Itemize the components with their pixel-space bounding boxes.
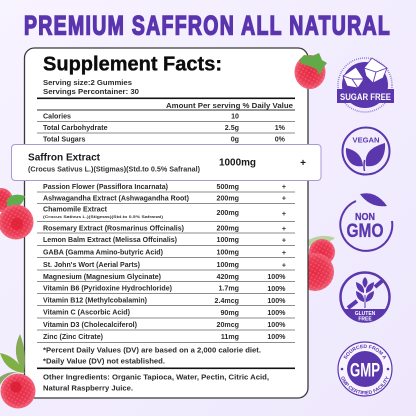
rows: herbal blend: + — [282, 210, 286, 218]
rows: herbal blend: Ashwagandha Extract (Ashwagandha Root) — [43, 194, 190, 202]
raspberry bottom left — [0, 334, 36, 408]
rows: general: 1% — [275, 124, 286, 132]
other ingredients: Other Ingredients: Organic Tapioca, Water, Pectin, Citric Acid, — [43, 372, 269, 382]
rows: herbal blend: 200mg — [217, 194, 239, 202]
rows: general: Total Carbohydrate — [43, 124, 108, 132]
other ingredients: Natural Raspberry Juice. — [43, 384, 133, 392]
rows: herbal blend: + — [282, 249, 286, 257]
callout: saffron extract: 1000mg — [219, 156, 256, 168]
rows: vitamins and minerals: Zinc (Zinc Citrate) — [43, 333, 104, 341]
title: PREMIUM SAFFRON ALL NATURAL — [24, 10, 390, 40]
rows: herbal blend: + — [282, 183, 286, 191]
rows: vitamins and minerals: 2.4mcg — [215, 297, 239, 305]
rows: herbal blend: 200mg — [217, 209, 239, 217]
rows: vitamins and minerals: 420mg — [217, 273, 239, 281]
icon: non gmo: NON — [355, 212, 375, 223]
rows: herbal blend: (Crocus Sativus L.)(Stigmas)(Std.to 0.5% Safranal) — [43, 214, 164, 219]
footnotes — [43, 346, 261, 366]
footnotes: *Daily Value (DV) not established. — [43, 356, 165, 366]
rows: general: 10 — [231, 112, 239, 120]
callout: saffron extract: (Crocus Sativus L.)(Stigmas)(Std.to 0.5% Safranal) — [28, 166, 200, 174]
rows: herbal blend: Passion Flower (Passiflora Incarnata) — [43, 183, 169, 191]
serving info: Serving size:2 Gummies — [43, 79, 132, 87]
icon: gmp: GMP CERTIFIED FACILITY — [341, 376, 389, 394]
raspberries left — [0, 188, 34, 240]
rows: vitamins and minerals: 100% — [267, 273, 286, 281]
table header: Amount Per serving % Daily Value — [166, 102, 293, 110]
rows: vitamins and minerals: 100% — [267, 321, 286, 329]
rows: general: 2.5g — [225, 124, 239, 132]
icon: sugar free — [337, 58, 394, 112]
rows: vitamins and minerals: 100% — [267, 333, 286, 341]
rows: general: Calories — [43, 112, 71, 120]
footnotes: *Percent Daily Values (DV) are based on a 2,000 calorie diet. — [43, 346, 261, 354]
rows: vitamins and minerals: 11mg — [221, 333, 239, 341]
rows: herbal blend: Chamomile Extract — [43, 206, 108, 214]
rows: vitamins and minerals: 100% — [267, 285, 286, 293]
heading: Supplement Facts: — [43, 54, 222, 76]
rows: herbal blend — [37, 183, 295, 270]
rows: herbal blend: 100mg — [217, 236, 239, 244]
rows: herbal blend: + — [282, 225, 286, 233]
rows: herbal blend: St. John's Wort (Aerial Parts) — [43, 261, 141, 269]
icon: gluten free — [340, 272, 390, 322]
rows: vitamins and minerals: Magnesium (Magnesium Glycinate) — [43, 273, 162, 281]
icon: gmp — [337, 341, 393, 397]
rows: herbal blend: + — [282, 194, 286, 202]
icon: gluten free: FREE — [358, 316, 372, 322]
rows: general: 0% — [275, 136, 286, 144]
rows: herbal blend: + — [282, 236, 286, 244]
rows: general: Total Sugars — [43, 136, 85, 144]
icon: vegan — [342, 128, 390, 174]
raspberry behind panel right — [296, 236, 335, 291]
rows: herbal blend: Lemon Balm Extract (Melissa Offcinalis) — [43, 236, 178, 244]
serving info — [43, 79, 139, 96]
rows: vitamins and minerals: 1.7mg — [218, 284, 239, 292]
rows: herbal blend: 500mg — [217, 183, 239, 191]
panel: supplement facts — [24, 48, 308, 398]
rows: vitamins and minerals: 20mcg — [217, 321, 239, 329]
rows: herbal blend: 200mg — [217, 224, 239, 232]
icon: sugar free: SUGAR FREE — [340, 92, 391, 102]
rows: vitamins and minerals: 100% — [267, 297, 286, 305]
icon: vegan: VEGAN — [352, 136, 380, 144]
callout: saffron extract: + — [300, 158, 306, 169]
icon: gmp: SOURCED FROM A — [344, 344, 386, 360]
rows: herbal blend: GABA (Gamma Amino-butyric Acid) — [43, 248, 164, 256]
rows: vitamins and minerals: 90mg — [220, 309, 239, 317]
rows: general — [37, 112, 295, 144]
rows: herbal blend: Rosemary Extract (Rosmarinus Offcinalis) — [43, 224, 185, 232]
rows: herbal blend: 100mg — [217, 261, 239, 269]
rows: vitamins and minerals: Vitamin B6 (Pyridoxine Hydrochloride) — [43, 284, 173, 292]
callout: saffron extract — [12, 144, 321, 180]
other ingredients — [43, 372, 269, 392]
rows: vitamins and minerals: Vitamin B12 (Methylcobalamin) — [43, 296, 148, 304]
callout: saffron extract: Saffron Extract — [28, 152, 101, 164]
icon: non gmo — [340, 193, 392, 251]
rows: vitamins and minerals: Vitamin D3 (Cholecalciferol) — [43, 321, 138, 329]
icon: gmp: GMP — [350, 360, 380, 382]
icon: non gmo: GMO — [346, 221, 384, 242]
rows: vitamins and minerals — [37, 273, 295, 342]
rows: general: 0g — [231, 136, 239, 144]
rows: herbal blend: + — [282, 262, 286, 270]
raspberry top — [294, 53, 327, 89]
rows: vitamins and minerals: Vitamin C (Ascorbic Acid) — [43, 308, 131, 316]
icon: gluten free: GLUTEN — [355, 311, 376, 317]
rows: vitamins and minerals: 100% — [267, 309, 286, 317]
rows: herbal blend: 100mg — [217, 248, 239, 256]
serving info: Servings Percontainer: 30 — [43, 88, 139, 96]
